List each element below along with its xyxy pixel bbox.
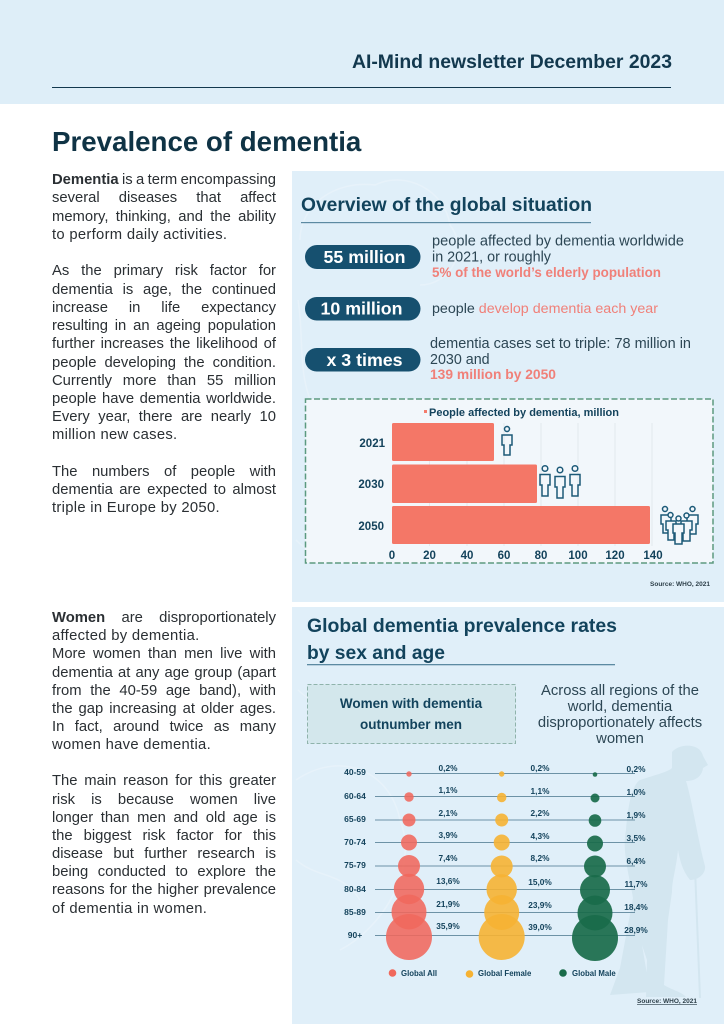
values: global female: 4,3% [531,831,550,841]
panel: prevalence rates by sex and age [292,607,724,1024]
year labels: 2021 [359,438,386,450]
text block: women: risk is because women live [52,792,276,808]
values: global female: 39,0% [528,922,552,932]
values: global male: 11,7% [624,879,648,889]
values: global female: 8,2% [531,853,550,863]
text block: what is dementia: triple in Europe by 2050. [52,500,220,516]
header band [0,0,724,104]
legend [389,969,616,978]
stat: x 3 times: dementia cases set to triple: 78 million in [430,336,691,352]
age labels [344,767,366,940]
text block: women: the gap increasing at older ages. [52,701,276,717]
stat: 10 million: 10 million [320,298,403,318]
callout: women outnumber men [308,684,516,744]
values: global male: 28,9% [624,925,648,935]
legend: Global Female [478,969,532,978]
text block: what is dementia: to perform daily activities. [52,227,227,243]
bars [392,423,650,544]
text block: women: Women are disproportionately [52,610,276,626]
age labels: 75-79 [344,860,366,870]
values: global all: 2,1% [439,808,458,818]
text: across all regions: disproportionately affects [538,715,702,731]
stat: 55 million: people affected by dementia worldwide [432,234,684,250]
values: global all: 35,9% [436,921,460,931]
stat: 55 million: 5% of the world’s elderly population [432,265,661,280]
text block: women: In fact, around twice as many [52,719,276,735]
callout: women outnumber men: Women with dementia [340,696,483,711]
heading rule [301,222,591,223]
year labels: 2030 [358,479,384,491]
values: global male: 1,0% [627,787,646,797]
chart legend: People affected by dementia, million [429,407,619,419]
text: across all regions: Across all regions of the [541,683,699,699]
x axis labels: 120 [605,550,625,562]
values: global male: 0,2% [627,764,646,774]
text block: what is dementia: dementia is age, the continued [52,282,276,298]
age labels: 90+ [348,930,362,940]
values: global all: 0,2% [439,763,458,773]
text block: what is dementia: increase in life expectancy [52,300,276,316]
age labels: 80-84 [344,884,366,894]
stat: 10 million: people develop dementia each year [432,301,658,317]
values: global female: 15,0% [528,877,552,887]
text: across all regions: world, dementia [567,699,673,715]
icon: one person [502,426,512,455]
text block: women: reasons for the higher prevalence [52,882,276,898]
text block: women: the biggest risk factor for this [52,828,276,844]
stat: x 3 times [305,336,691,382]
stat: 55 million [305,234,684,280]
values: global male: 3,5% [627,833,646,843]
text: across all regions: women [595,731,644,747]
bar chart: people affected by dementia [306,399,713,563]
text block: what is dementia: resulting in an ageing population [52,318,276,334]
text block: women: longer than men and old age is [52,810,276,826]
text block: women: of dementia in women. [52,900,207,916]
bubbles: global female [479,771,525,960]
values: global female [528,763,552,932]
text block: what is dementia: dementia are expected to almost [52,482,276,498]
x axis labels: 0 [389,550,395,562]
age labels: 60-64 [344,791,366,801]
stat: x 3 times: x 3 times [326,350,403,370]
text block: what is dementia: Currently more than 55 million [52,373,276,389]
text block: women [52,610,276,916]
stat: x 3 times: 2030 and [430,352,490,368]
values: global all [436,763,460,931]
text block: what is dementia: As the primary risk factor for [52,263,276,279]
x axis labels: 100 [568,550,588,562]
age labels: 40-59 [344,767,366,777]
text block: what is dementia: The numbers of people with [52,464,276,480]
x axis labels: 20 [423,550,436,562]
values: global male: 6,4% [627,856,646,866]
stat: 55 million: in 2021, or roughly [432,250,552,266]
text block: what is dementia [52,172,276,516]
text block: what is dementia: Every year, there are nearly 10 [52,409,276,425]
values: global female: 1,1% [531,786,550,796]
text block: what is dementia: several diseases that affect [52,190,276,206]
text block: women: affected by dementia. [52,628,200,644]
text block: what is dementia: further increases the likelihood of [52,336,276,352]
text block: what is dementia: Dementia is a term encompassing [52,172,276,188]
values: global all: 7,4% [439,853,458,863]
page title: Prevalence of dementia [52,126,361,157]
legend: Global All [401,969,437,978]
x axis labels: 140 [643,550,663,562]
bubbles: global all [386,771,432,960]
x axis labels: 60 [498,550,510,562]
text block: women: women have dementia. [52,737,211,753]
year labels [358,438,386,533]
values: global male: 18,4% [624,902,648,912]
text block: what is dementia: people developing the condition. [52,355,276,371]
panel: prevalence rates by sex and age: by sex and age [307,642,445,664]
text block: women: The main reason for this greater [52,773,276,789]
text: across all regions [538,683,702,747]
text block: women: being conducted to explore the [52,864,276,880]
callout: women outnumber men: outnumber men [360,717,462,732]
values: global all: 3,9% [439,830,458,840]
values: global all: 21,9% [436,899,460,909]
age labels: 70-74 [344,837,366,847]
text block: what is dementia: million new cases. [52,427,177,443]
values: global female: 0,2% [531,763,550,773]
panel: overview of the global situation [292,171,724,602]
values: global all: 13,6% [436,876,460,886]
text block: women: from the 40-59 age band), with [52,683,276,699]
bubbles: global male [572,772,618,961]
values: global male [624,764,648,935]
icon: elderly person silhouette [610,746,708,998]
bubble chart [344,763,648,978]
source note: Source: WHO, 2021 [650,581,710,588]
values: global male: 1,9% [627,810,646,820]
newsletter title: AI-Mind newsletter December 2023 [352,51,672,73]
heading rule [307,664,615,665]
values: global female: 2,2% [531,808,550,818]
legend: Global Male [572,969,616,978]
text block: what is dementia: people have dementia worldwide. [52,391,276,407]
icon: five people [661,506,698,544]
year labels: 2050 [358,521,384,533]
text block: women: dementia at any age group (apart [52,664,276,680]
text block: women: disease but further research is [52,846,276,862]
text block: what is dementia: memory, thinking, and the ability [52,209,276,225]
source note: Source: WHO, 2021 [637,998,697,1005]
x axis labels: 40 [461,550,473,562]
stat: 55 million: 55 million [323,247,406,267]
x axis labels [389,550,663,562]
values: global female: 23,9% [528,900,552,910]
text block: women: More women than men live with [52,646,276,662]
heading: Global dementia prevalence rates [307,615,617,637]
stat: 10 million [305,297,658,320]
header rule [52,87,671,88]
age labels: 65-69 [344,814,366,824]
values: global all: 1,1% [439,785,458,795]
heading: Overview of the global situation [301,194,592,216]
stat: x 3 times: 139 million by 2050 [430,367,556,382]
x axis labels: 80 [535,550,547,562]
age labels: 85-89 [344,907,366,917]
icon: three people [540,466,580,498]
